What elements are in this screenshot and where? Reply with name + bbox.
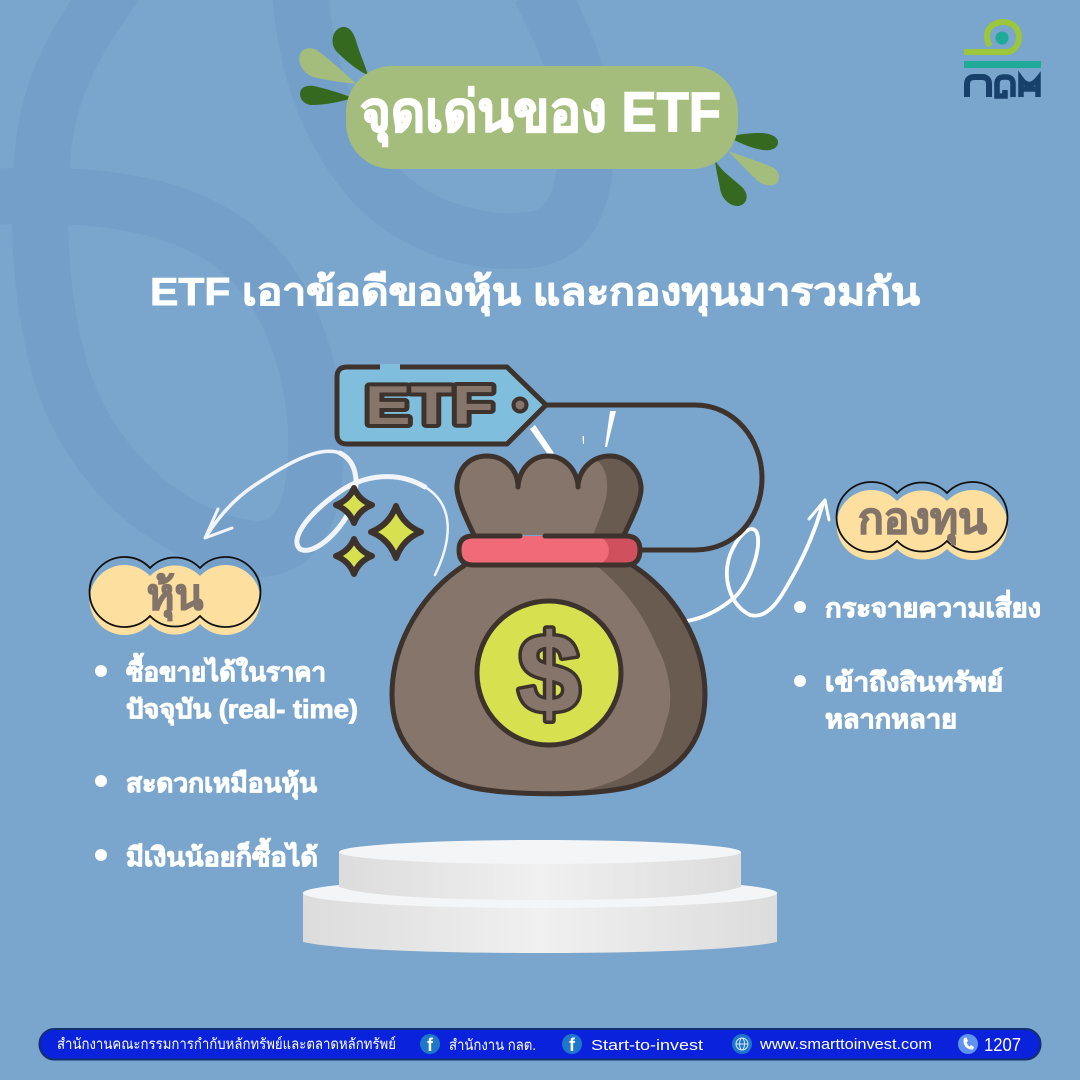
arrow: to stocks: [205, 451, 448, 575]
label: stocks: [90, 557, 260, 635]
title text: จุดเด่นของ ETF: [360, 80, 721, 147]
bag neck shadow: [593, 456, 641, 535]
facebook icon two: f: [569, 1035, 576, 1055]
facebook icon two: [562, 1034, 582, 1055]
bag body: [392, 565, 705, 794]
label: funds: [837, 482, 1007, 560]
band: [459, 536, 640, 565]
label text: กองทุน: [858, 495, 987, 545]
label fill: [90, 565, 260, 635]
sparkles: [336, 488, 421, 574]
pedestal upper tier: [339, 852, 741, 900]
bullet two: หลากหลาย: [825, 704, 957, 734]
bag body shadow: [570, 566, 703, 792]
footer organisation name: สำนักงานคณะกรรมการกำกับหลักทรัพย์และตลาดหลักทรัพย์: [57, 1036, 396, 1053]
bullet one: ซื้อขายได้ในราคา: [126, 652, 326, 687]
bag neck: [457, 456, 641, 535]
phone icon: [958, 1034, 978, 1054]
pedestal: [303, 840, 777, 953]
title pill: [346, 66, 738, 169]
logo: [964, 22, 1041, 97]
globe icon: [732, 1034, 752, 1054]
money bag illustration: [392, 405, 762, 794]
label fill: [837, 490, 1007, 560]
facebook icon: [420, 1034, 440, 1055]
bullet one: ปัจจุบัน (real- time): [126, 694, 358, 726]
bullet two: สะดวกเหมือนหุ้น: [126, 768, 317, 800]
title badge: [299, 27, 779, 206]
facebook page: Start-to-invest: [591, 1037, 704, 1054]
hotline: 1207: [984, 1035, 1021, 1055]
footer bar: [40, 1029, 1040, 1060]
arrow: to funds: [687, 500, 829, 621]
dollar sign: $: [518, 611, 580, 736]
label outline: [837, 482, 1007, 552]
tag label: ETF: [365, 374, 494, 436]
white accents near bag: [530, 411, 616, 456]
coin: [477, 601, 621, 745]
tag hole: [514, 398, 526, 412]
facebook icon: f: [427, 1035, 434, 1055]
fund benefits list: [794, 589, 1041, 734]
price tag: [337, 367, 546, 444]
title decorative drops: [299, 27, 779, 206]
website: www.smarttoinvest.com: [759, 1036, 932, 1053]
stock benefits list: [95, 652, 358, 872]
bullet two: [794, 667, 1003, 734]
label text: หุ้น: [147, 571, 203, 621]
bullet one: [95, 652, 358, 726]
facebook name: สำนักงาน กลต.: [449, 1037, 536, 1054]
bullet three: มีเงินน้อยก็ซื้อได้: [126, 837, 318, 872]
subtitle: ETF เอาข้อดีของหุ้น และกองทุนมารวมกัน: [150, 271, 920, 316]
pedestal lower tier: [303, 893, 777, 953]
string: [545, 405, 762, 550]
label outline: [90, 557, 260, 627]
bullet two: เข้าถึงสินทรัพย์: [825, 667, 1003, 697]
bullet one: กระจายความเสี่ยง: [825, 589, 1041, 623]
